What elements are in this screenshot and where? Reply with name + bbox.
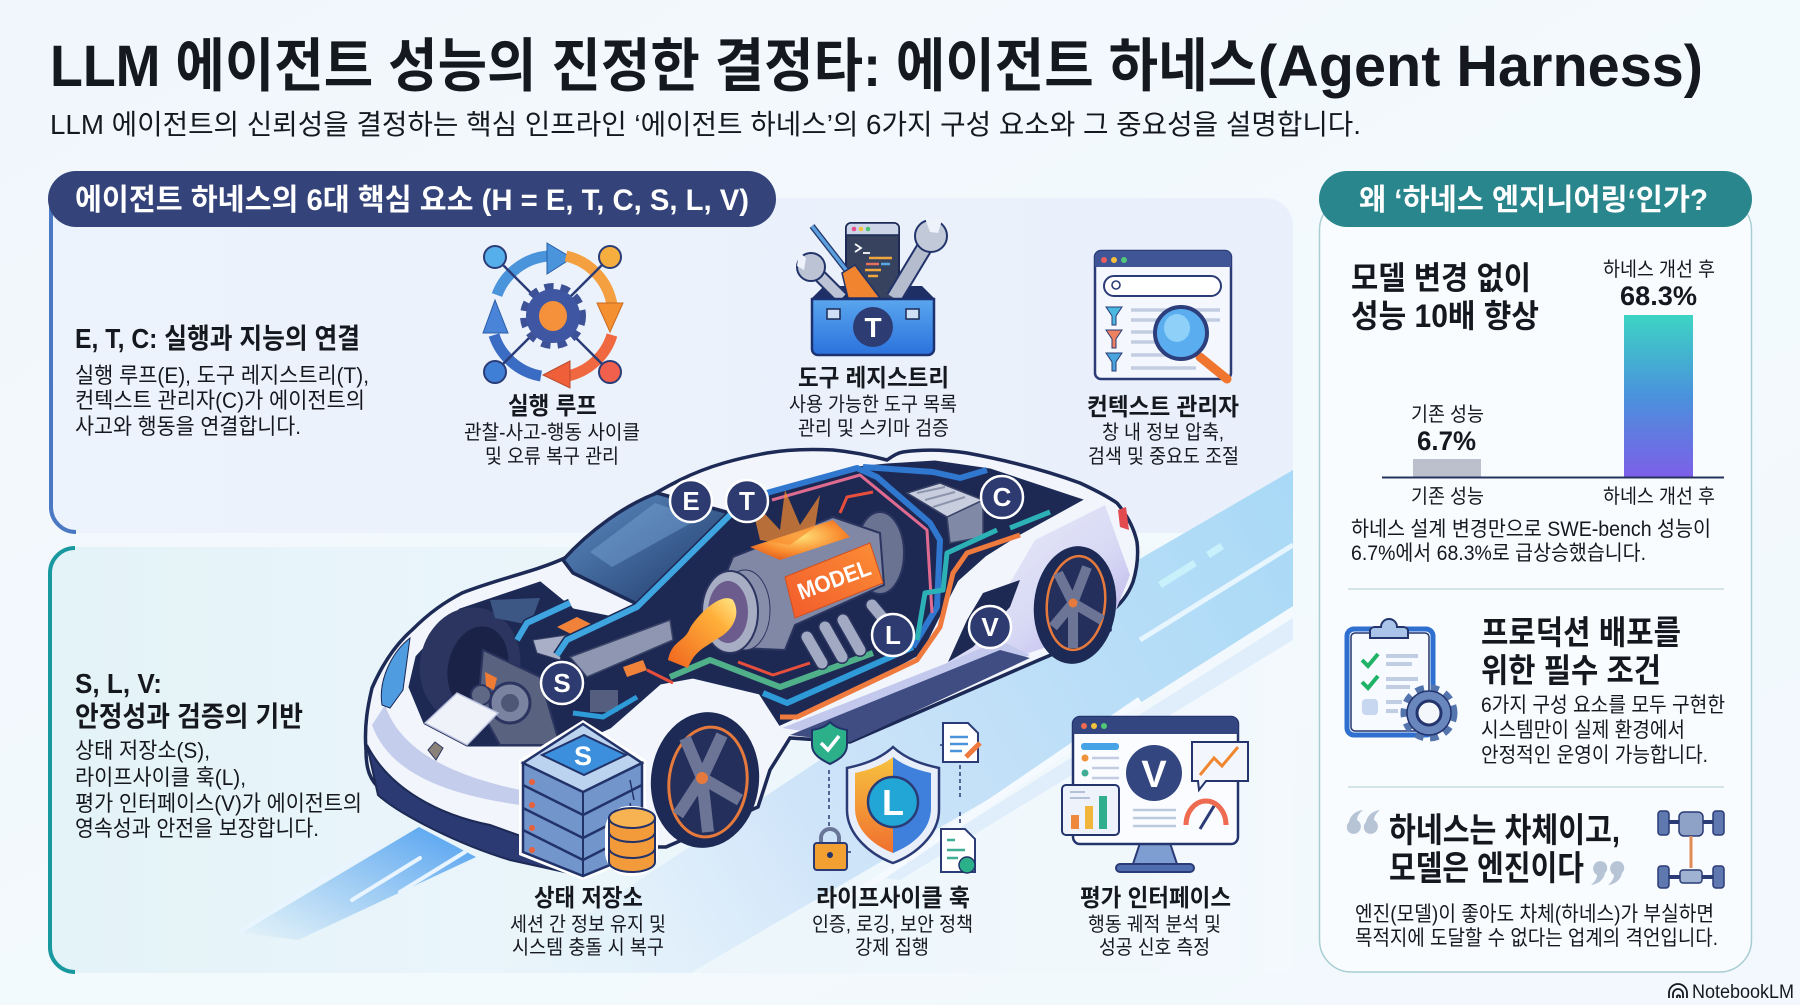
section header: six core elements	[48, 171, 776, 227]
label: context manager: 컨텍스트 관리자	[1087, 394, 1239, 421]
label: lifecycle hook: 라이프사이클 훅	[816, 885, 970, 912]
text: quote explanation: 목적지에 도달할 수 없다는 업계의 격언입니다.	[1355, 927, 1718, 950]
bar chart: baseline vs improved: 기존 성능	[1411, 485, 1484, 508]
cargo module	[947, 500, 983, 543]
icon: chassis	[1658, 811, 1724, 888]
text: quote explanation: 엔진(모델)이 좋아도 차체(하네스)가 부실하면	[1355, 903, 1714, 926]
text: production requirement: 시스템만이 실제 환경에서	[1481, 719, 1685, 742]
subtitle: LLM 에이전트의 신뢰성을 결정하는 핵심 인프라인 ‘에이전트 하네스’의 6가지 구성 요소와 그 중요성을 설명합니다.	[50, 109, 1361, 140]
text block: E, T, C: E, T, C: 실행과 지능의 연결	[75, 323, 360, 354]
label: context manager: 창 내 정보 압축,	[1102, 421, 1224, 444]
quote: harness is the chassis	[1389, 812, 1620, 888]
label: tool registry	[789, 365, 957, 440]
icon: context manager window	[1095, 251, 1231, 379]
label: execution loop	[464, 393, 640, 468]
left stripe: panel 1	[51, 205, 76, 532]
headline: 10x performance: 모델 변경 없이	[1351, 260, 1531, 296]
headline: 10x performance: 성능 10배 향상	[1351, 298, 1539, 334]
icon: lifecycle hook shield	[812, 722, 980, 873]
label: evaluation interface: 성공 신호 측정	[1099, 936, 1210, 959]
headlight and logo	[381, 638, 410, 708]
rear wheel	[1028, 542, 1122, 668]
text: chart caption: 6.7%에서 68.3%로 급상승했습니다.	[1351, 542, 1646, 565]
text block: S, L, V	[75, 668, 362, 841]
text block: S, L, V: 상태 저장소(S),	[75, 738, 210, 763]
badge L: L	[885, 620, 901, 650]
icon: lifecycle hook shield: L	[882, 782, 904, 823]
badge T	[726, 480, 768, 522]
label: lifecycle hook	[812, 885, 973, 959]
text: quote explanation	[1355, 903, 1718, 950]
body shading	[372, 705, 650, 840]
headline: 10x performance	[1351, 260, 1539, 334]
label: execution loop: 관찰-사고-행동 사이클	[464, 421, 640, 444]
text block: E, T, C: 컨텍스트 관리자(C)가 에이전트의	[75, 388, 365, 413]
road behind the car	[240, 470, 1293, 973]
NotebookLM logo: NotebookLM	[1692, 982, 1794, 1003]
text: production requirement: 안정적인 운영이 가능합니다.	[1481, 744, 1708, 767]
title: LLM 에이전트 성능의 진정한 결정타: 에이전트 하네스	[50, 34, 1257, 99]
badge C: C	[993, 482, 1012, 512]
quote: harness is the chassis: 모델은 엔진이다	[1389, 850, 1584, 888]
text: chart caption	[1351, 518, 1711, 565]
engine bay	[410, 462, 1080, 745]
badge C	[981, 476, 1023, 518]
icon: evaluation interface monitor	[1062, 717, 1248, 872]
text block: E, T, C: 실행 루프(E), 도구 레지스트리(T),	[75, 363, 369, 388]
section header: six core elements: 에이전트 하네스의 6대 핵심 요소 (H = E, T, C, S, L, V)	[75, 184, 749, 217]
text block: S, L, V: 영속성과 안전을 보장합니다.	[75, 816, 319, 841]
label: state store: 세션 간 정보 유지 및	[510, 913, 666, 936]
label: evaluation interface: 행동 궤적 분석 및	[1088, 913, 1221, 936]
label: evaluation interface	[1080, 885, 1231, 959]
text block: E, T, C: 사고와 행동을 연결합니다.	[75, 414, 301, 439]
icon: evaluation interface monitor: V	[1141, 754, 1167, 796]
label: evaluation interface: 평가 인터페이스	[1080, 885, 1231, 912]
badge S: S	[553, 668, 571, 698]
illustration: car cutaway	[365, 449, 1138, 875]
quote marks	[1347, 810, 1624, 885]
section header: why harness	[1319, 171, 1752, 227]
bar chart: baseline vs improved	[1382, 258, 1724, 508]
text block: E, T, C	[75, 323, 369, 439]
badge V	[969, 606, 1011, 648]
text block: S, L, V: S, L, V:	[75, 668, 162, 699]
text: production requirement: 위한 필수 조건	[1481, 652, 1661, 689]
label: context manager	[1087, 394, 1239, 468]
text: production requirement: 프로덕션 배포를	[1481, 614, 1681, 651]
badge V: V	[981, 612, 999, 642]
text block: S, L, V: 평가 인터페이스(V)가 에이전트의	[75, 791, 362, 816]
icon: state store server stack: S	[574, 741, 592, 771]
manifold ribs	[807, 605, 887, 663]
badge L	[872, 614, 914, 656]
badges on the car	[541, 476, 1023, 704]
label: lifecycle hook: 강제 집행	[855, 936, 929, 959]
front tire	[409, 598, 531, 732]
side vent	[948, 580, 1020, 662]
badge E	[670, 480, 712, 522]
illustration: car cutaway: MODEL	[794, 554, 874, 605]
panel: why harness engineering	[1319, 171, 1752, 972]
front wheel	[644, 707, 766, 853]
text: production requirement	[1481, 614, 1725, 767]
bar chart: baseline vs improved: 하네스 개선 후	[1603, 485, 1715, 508]
text block: S, L, V: 라이프사이클 훅(L),	[75, 765, 246, 790]
front white hood piece	[425, 693, 498, 745]
panel: S, L, V background	[50, 547, 1293, 973]
icon: execution loop	[483, 243, 623, 388]
label: tool registry: 도구 레지스트리	[798, 365, 949, 392]
front engine block	[478, 650, 560, 745]
bar chart: baseline vs improved: 6.7%	[1417, 426, 1476, 456]
windshield	[563, 493, 730, 607]
label: state store	[510, 885, 666, 959]
badge S	[541, 662, 583, 704]
badge T: T	[739, 486, 755, 516]
icon: state store server stack	[519, 720, 658, 880]
label: lifecycle hook: 인증, 로깅, 보안 정책	[812, 913, 973, 936]
bar chart: baseline vs improved: 하네스 개선 후	[1603, 258, 1715, 281]
section header: why harness: 왜 ‘하네스 엔지니어링‘인가?	[1359, 184, 1708, 217]
label: tool registry: 사용 가능한 도구 목록	[789, 393, 957, 416]
label: execution loop: 및 오류 복구 관리	[485, 445, 619, 468]
bar chart: baseline vs improved: 기존 성능	[1411, 403, 1484, 426]
icon: tool registry toolbox: T	[864, 312, 882, 343]
label: execution loop: 실행 루프	[508, 393, 597, 420]
label: tool registry: 관리 및 스키마 검증	[798, 417, 949, 440]
label: state store: 상태 저장소	[534, 885, 643, 912]
icon: clipboard with gear	[1347, 619, 1453, 737]
wiring	[517, 467, 1050, 717]
label: state store: 시스템 충돌 시 복구	[512, 936, 664, 959]
label: context manager: 검색 및 중요도 조절	[1088, 445, 1239, 468]
icon: tool registry toolbox	[797, 218, 947, 355]
panel: E, T, C background	[50, 198, 1293, 533]
badge E: E	[682, 486, 700, 516]
text block: S, L, V: 안정성과 검증의 기반	[75, 701, 303, 732]
bar chart: baseline vs improved: 68.3%	[1620, 281, 1697, 311]
left stripe: panel 2	[50, 548, 75, 972]
model engine	[856, 512, 904, 594]
car body	[365, 449, 1138, 847]
text: chart caption: 하네스 설계 변경만으로 SWE-bench 성능이	[1351, 518, 1711, 541]
quote: harness is the chassis: 하네스는 차체이고,	[1389, 812, 1620, 850]
text: production requirement: 6가지 구성 요소를 모두 구현한	[1481, 694, 1725, 717]
title: (Agent Harness)	[1258, 34, 1703, 99]
